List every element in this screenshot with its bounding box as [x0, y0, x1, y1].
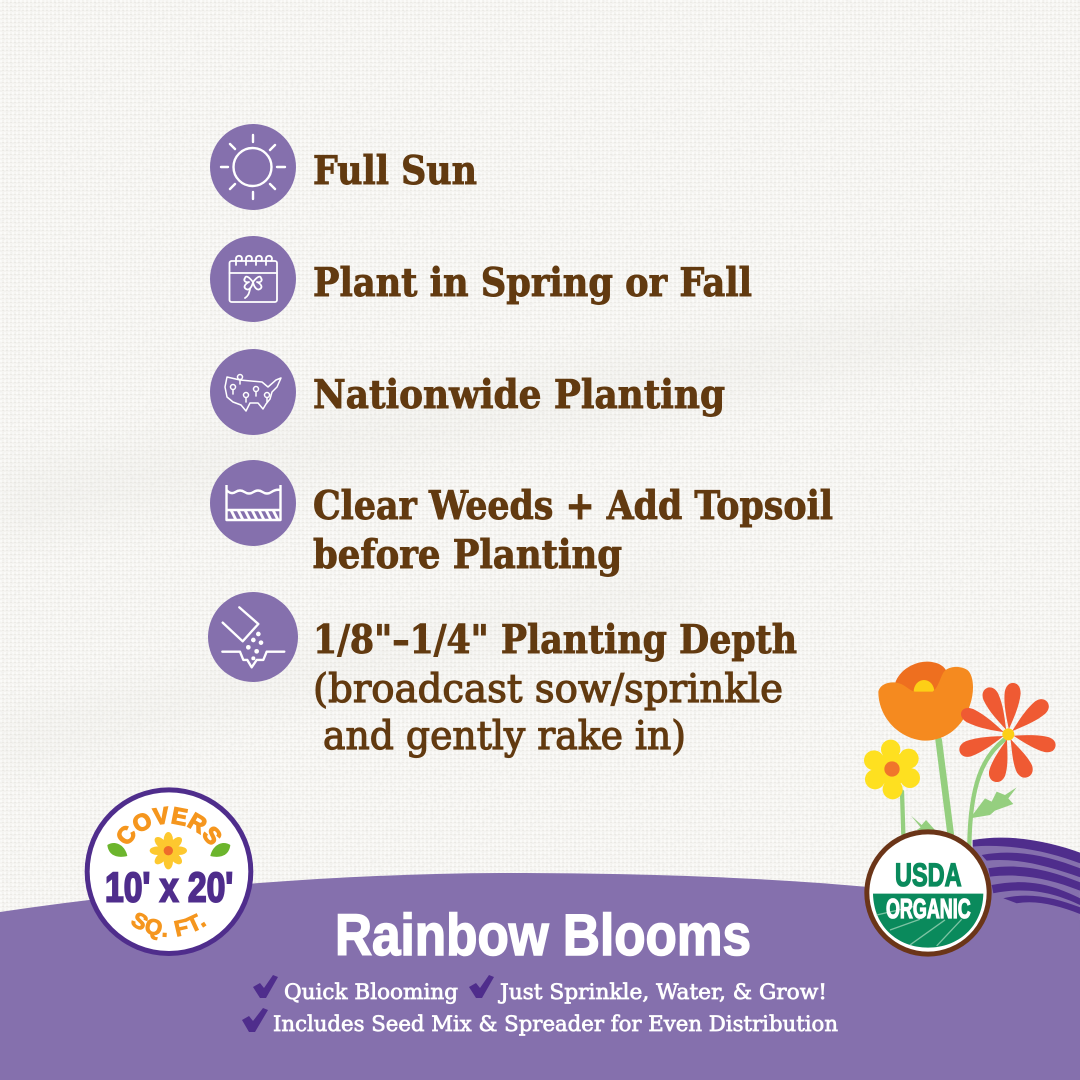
- check icon: [469, 975, 494, 998]
- purple band: [0, 873, 1080, 1080]
- daisy flower: [957, 682, 1057, 784]
- benefit: quick blooming: Quick Blooming: [284, 980, 458, 1004]
- purple hill stripes: [973, 838, 1080, 930]
- stems and leaves: [902, 740, 1017, 847]
- icon: calendar with clover: [210, 236, 296, 322]
- heading: nationwide planting: Nationwide Planting: [313, 372, 725, 418]
- list row: planting season: [210, 236, 752, 322]
- list row: nationwide planting: [210, 349, 725, 435]
- benefit: includes seed mix: Includes Seed Mix & Spreader for Even Distribution: [273, 1012, 838, 1036]
- list row: clear weeds: [210, 460, 833, 578]
- heading: clear weeds and add topsoil: Clear Weeds + Add Topsoil: [313, 483, 833, 529]
- icon: soil layers: [210, 460, 296, 546]
- text: sowing instruction line two: and gently rake in): [323, 714, 686, 759]
- poppy flower: [878, 662, 973, 741]
- text: coverage size: 10' x 20': [105, 864, 233, 911]
- title: rainbow blooms: Rainbow Blooms: [335, 903, 751, 968]
- heading: full sun: Full Sun: [313, 148, 477, 194]
- checklist of benefits: [242, 975, 838, 1036]
- text: sowing instruction line one: (broadcast sow/sprinkle: [313, 667, 783, 712]
- curved text: covers: COVERS: [117, 806, 222, 845]
- icon: badge flower: [150, 832, 187, 869]
- USDA organic seal: [864, 829, 992, 957]
- heading: plant in spring or fall: Plant in Spring or Fall: [313, 260, 752, 306]
- icon: usa map with pins: [210, 349, 296, 435]
- USDA organic seal: ORGANIC: [886, 893, 971, 924]
- check icon: [242, 1008, 268, 1032]
- icon: seeds dropping into soil: [208, 592, 298, 682]
- USDA organic seal: USDA: [895, 857, 962, 893]
- list row: full sun: [210, 124, 477, 210]
- heading: planting depth: 1/8"–1/4" Planting Depth: [313, 617, 797, 663]
- heading: before planting: before Planting: [313, 532, 622, 578]
- check icon: [253, 975, 278, 998]
- benefit: just sprinkle: Just Sprinkle, Water, & Grow!: [498, 980, 827, 1004]
- flower illustration with stripes: [864, 662, 1080, 957]
- icon: sun: [210, 124, 296, 210]
- list row: planting depth: [208, 592, 797, 759]
- icon: green leaves: [107, 843, 230, 857]
- coverage badge: [84, 787, 254, 956]
- yellow flower: [864, 740, 920, 799]
- curved text: square feet: SQ. FT.: [131, 912, 206, 940]
